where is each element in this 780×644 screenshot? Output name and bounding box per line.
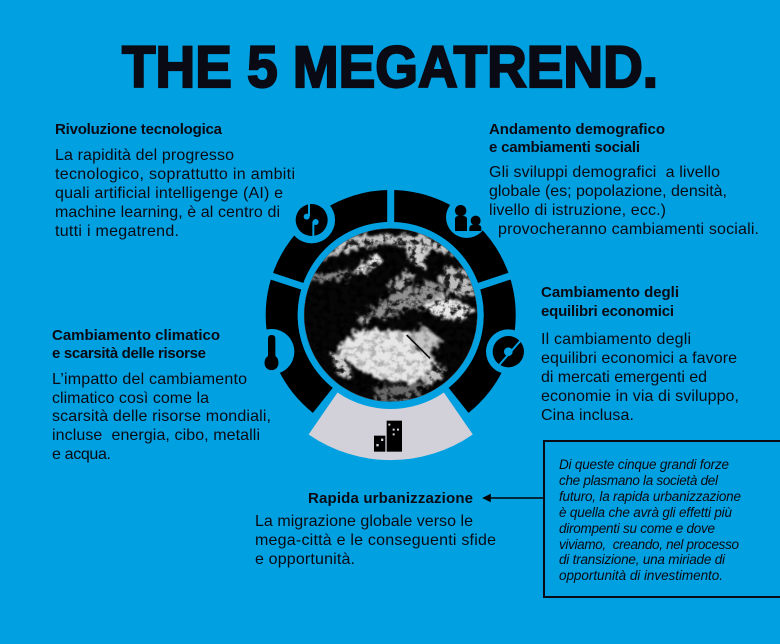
icon: technology xyxy=(288,197,335,243)
text block: Cambiamento degli equilibri economici: di mercati emergenti ed xyxy=(541,369,707,386)
text block: Rivoluzione tecnologica: Rivoluzione tecnologica xyxy=(55,121,223,138)
globe xyxy=(300,227,483,403)
icon: economic balance xyxy=(486,329,531,374)
text block: Cambiamento degli equilibri economici: economie in via di sviluppo, xyxy=(541,388,739,405)
text block: Cambiamento degli equilibri economici: Cambiamento degli xyxy=(541,284,679,301)
title: THE 5 MEGATREND. xyxy=(122,35,658,100)
callout: è quella che avrà gli effetti più xyxy=(559,505,732,520)
text block: Rapida urbanizzazione: mega-città e le conseguenti sfide xyxy=(255,532,496,549)
text block: Andamento demografico: Gli sviluppi demografici a livello xyxy=(489,164,720,181)
urban segment highlighted in grey xyxy=(309,392,473,460)
text block: Cambiamento degli equilibri economici xyxy=(541,284,739,424)
text block: Cambiamento climatico: e acqua. xyxy=(52,446,111,463)
callout: viviamo, creando, nel processo xyxy=(559,537,739,552)
text block: Rivoluzione tecnologica: quali artificial intelligenge (AI) e xyxy=(55,185,283,202)
text block: Andamento demografico: provocheranno cambiamenti sociali. xyxy=(498,221,759,238)
text block: Andamento demografico: livello di istruzione, ecc.) xyxy=(489,202,666,219)
text block: Cambiamento climatico xyxy=(52,327,271,463)
callout: dirompenti su come e dove xyxy=(559,521,715,536)
text block: Rivoluzione tecnologica: tutti i megatrend. xyxy=(55,223,179,240)
text block: Cambiamento degli equilibri economici: equilibri economici a favore xyxy=(541,350,737,367)
text block: Cambiamento degli equilibri economici: Cina inclusa. xyxy=(541,407,634,424)
text block: Rapida urbanizzazione: e opportunità. xyxy=(255,551,355,568)
text block: Rapida urbanizzazione xyxy=(255,490,496,568)
callout: futuro, la rapida urbanizzazione xyxy=(559,489,741,504)
callout: che plasmano la società del xyxy=(559,473,719,488)
text block: Rivoluzione tecnologica xyxy=(55,121,295,240)
callout xyxy=(544,441,780,597)
text block: Andamento demografico: globale (es; popolazione, densità, xyxy=(489,183,727,200)
segmented ring xyxy=(262,180,519,470)
text block: Cambiamento climatico: climatico così come la xyxy=(52,390,209,407)
text block: Rapida urbanizzazione: Rapida urbanizzazione xyxy=(308,490,473,507)
text block: Rivoluzione tecnologica: machine learning, è al centro di xyxy=(55,204,280,221)
icon: people xyxy=(446,197,487,238)
text block: Cambiamento climatico: e scarsità delle risorse xyxy=(52,345,206,362)
text block: Cambiamento climatico: incluse energia, cibo, metalli xyxy=(52,427,260,444)
text block: Andamento demografico: e cambiamenti sociali xyxy=(489,139,640,156)
callout: Di queste cinque grandi forze xyxy=(559,457,729,472)
text block: Cambiamento degli equilibri economici: Il cambiamento degli xyxy=(541,331,691,348)
text block: Cambiamento climatico: Cambiamento climatico xyxy=(52,327,220,344)
text block: Andamento demografico: Andamento demografico xyxy=(489,121,665,138)
text block: Cambiamento climatico: L’impatto del cambiamento xyxy=(52,371,247,388)
text block: Cambiamento degli equilibri economici: equilibri economici xyxy=(541,303,674,320)
text block: Andamento demografico xyxy=(489,121,759,238)
icon: city buildings xyxy=(374,421,402,452)
text block: Rapida urbanizzazione: La migrazione globale verso le xyxy=(255,513,473,530)
text block: Rivoluzione tecnologica: tecnologico, soprattutto in ambiti xyxy=(55,166,295,183)
text block: Rivoluzione tecnologica: La rapidità del progresso xyxy=(55,147,234,164)
arrow from callout to Rapida urbanizzazione xyxy=(484,495,544,501)
callout: opportunità di investimento. xyxy=(559,568,723,583)
text block: Cambiamento climatico: scarsità delle risorse mondiali, xyxy=(52,408,271,425)
icon: thermometer xyxy=(249,329,294,374)
callout: di transizione, una miriade di xyxy=(559,552,726,567)
